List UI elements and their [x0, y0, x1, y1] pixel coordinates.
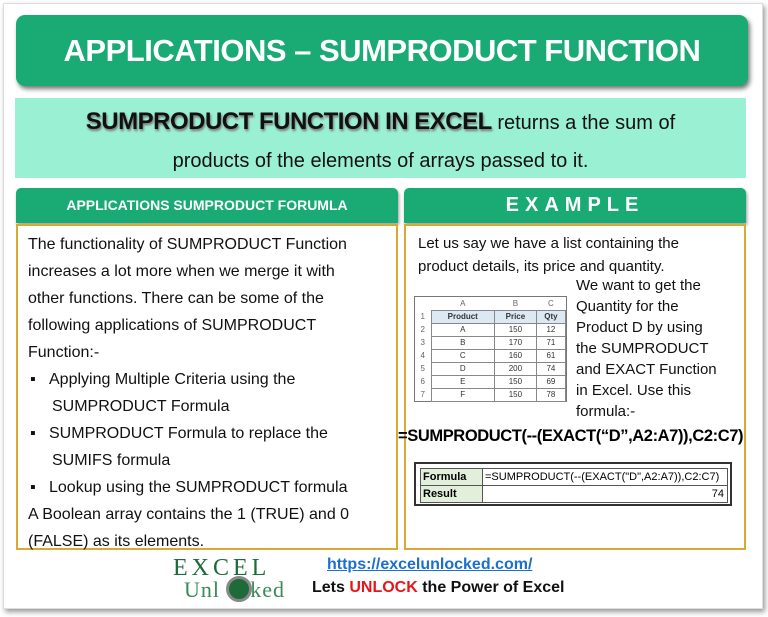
- data table: A: [460, 325, 465, 334]
- link: https://excelunlocked.com/: [327, 556, 532, 573]
- header: applications: APPLICATIONS SUMPRODUCT FORUMLA: [66, 197, 348, 213]
- data table: C: [460, 351, 466, 360]
- data table: 4: [421, 351, 425, 360]
- panel: example: the SUMPRODUCT: [576, 340, 709, 357]
- panel: applications: ▪ Applying Multiple Criteria using the: [30, 371, 295, 388]
- panel: applications: Function:-: [28, 344, 99, 361]
- data table: 61: [546, 351, 555, 360]
- panel: applications: ▪ SUMPRODUCT Formula to replace the: [30, 425, 328, 442]
- panel: example: in Excel. Use this: [576, 382, 691, 399]
- logo: Unl cked: [184, 577, 285, 602]
- data table: 150: [509, 390, 522, 399]
- data table: 6: [421, 377, 425, 386]
- panel: example: formula:-: [576, 403, 635, 420]
- result table: =SUMPRODUCT(--(EXACT("D",A2:A7)),C2:C7): [485, 471, 719, 483]
- definition banner: SUMPRODUCT FUNCTION IN EXCEL returns a the sum of: [86, 108, 675, 135]
- data table: B: [513, 299, 518, 308]
- data table: 69: [546, 377, 555, 386]
- formula text: =SUMPRODUCT(--(EXACT(“D”,A2:A7)),C2:C7): [398, 427, 743, 445]
- panel: example: We want to get the: [576, 277, 701, 294]
- data table: 3: [421, 338, 425, 347]
- data table: Qty: [544, 312, 558, 321]
- result table: Formula: [423, 471, 466, 483]
- panel: applications: (FALSE) as its elements.: [28, 533, 204, 550]
- definition banner: [15, 98, 746, 178]
- data table: F: [460, 390, 465, 399]
- panel: example: Quantity for the: [576, 298, 679, 315]
- data table: 170: [509, 338, 522, 347]
- result table: [414, 462, 732, 506]
- data table: 71: [546, 338, 555, 347]
- data table: Product: [448, 312, 478, 321]
- panel: example: Product D by using: [576, 319, 703, 336]
- result table: Result: [423, 488, 457, 500]
- data table: 160: [509, 351, 522, 360]
- data table: 150: [509, 325, 522, 334]
- header: example: EXAMPLE: [506, 194, 644, 216]
- data table: D: [460, 364, 466, 373]
- data table: 1: [421, 312, 425, 321]
- data table: 200: [509, 364, 522, 373]
- definition banner: products of the elements of arrays passed to it.: [173, 150, 588, 172]
- data table: [414, 296, 567, 402]
- panel: applications: SUMIFS formula: [52, 452, 170, 469]
- data table: C: [548, 299, 554, 308]
- data table: 74: [546, 364, 555, 373]
- panel: example: product details, its price and quantity.: [418, 258, 665, 275]
- panel: applications: SUMPRODUCT Formula: [52, 398, 230, 415]
- data table: 78: [546, 390, 555, 399]
- data table: 5: [421, 364, 425, 373]
- panel: applications: A Boolean array contains the 1 (TRUE) and 0: [28, 506, 349, 523]
- panel: applications: other functions. There can be some of the: [28, 290, 324, 307]
- logo: [173, 555, 285, 602]
- logo: EXCEL: [173, 555, 270, 581]
- header: applications: [16, 188, 398, 223]
- panel: applications: following applications of SUMPRODUCT: [28, 317, 316, 334]
- data table: B: [460, 338, 465, 347]
- data table: E: [460, 377, 465, 386]
- data table: 7: [421, 390, 425, 399]
- panel: applications: The functionality of SUMPRODUCT Function: [28, 236, 347, 253]
- result table: 74: [712, 488, 724, 500]
- panel: applications: ▪ Lookup using the SUMPRODUCT formula: [30, 479, 348, 496]
- data table: 2: [421, 325, 425, 334]
- header: example: [404, 188, 746, 223]
- title: [16, 15, 748, 86]
- panel: example: [404, 224, 746, 550]
- panel: example: Let us say we have a list containing the: [418, 235, 679, 252]
- data table: A: [460, 299, 465, 308]
- data table: 150: [509, 377, 522, 386]
- title: APPLICATIONS – SUMPRODUCT FUNCTION: [64, 33, 700, 68]
- data table: Price: [506, 312, 525, 321]
- tagline: Lets UNLOCK the Power of Excel: [312, 579, 564, 596]
- panel: example: and EXACT Function: [576, 361, 717, 378]
- panel: applications: increases a lot more when we merge it with: [28, 263, 335, 280]
- panel: applications: [16, 224, 398, 550]
- data table: 12: [546, 325, 555, 334]
